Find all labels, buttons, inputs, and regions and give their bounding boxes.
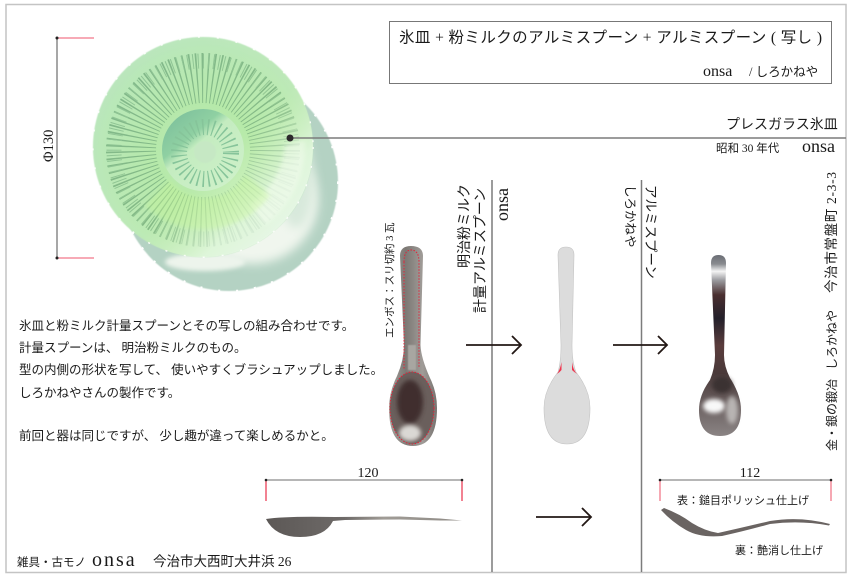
finish note: front: 表：鎚目ポリッシュ仕上げ (677, 493, 809, 507)
intro text block: しろかねやさんの製作です。 (19, 386, 180, 400)
footer shop info: 雑具・古モノ (17, 555, 86, 569)
dimension: copied spoon length: 112 (740, 466, 760, 481)
plate era and maker (716, 136, 835, 156)
emboss note: エンボス：スリ切約 3 瓦 (383, 222, 396, 338)
finish note: back: 裏：艶消し仕上げ (735, 543, 823, 557)
intro text block: 氷皿と粉ミルク計量スプーンとその写しの組み合わせです。 (19, 318, 354, 333)
intro text block: 型の内側の形状を写して、 使いやすくブラシュアップしました。 (19, 362, 383, 377)
intro text block (19, 318, 383, 443)
dimension: plate diameter: Φ130 (41, 130, 57, 162)
maker credit (703, 63, 818, 80)
copied spoon side view (661, 508, 830, 536)
vertical shop info: 金・銀の鍛冶 (825, 379, 839, 451)
vertical shop info (824, 172, 839, 451)
column dividers (492, 180, 642, 572)
spoon template silhouette (544, 247, 590, 444)
original spoon photo (389, 246, 437, 446)
title text: 氷皿 + 粉ミルクのアルミスプーン + アルミスプーン ( 写し ) (399, 28, 822, 46)
center well (162, 109, 244, 191)
glass plate photo (93, 37, 338, 291)
vertical shop info: 今治市常盤町 2-3-3 (824, 172, 839, 293)
column label: onsa: onsa (492, 188, 512, 221)
back plate (120, 73, 338, 291)
intro text block: 計量スプーンは、 明治粉ミルクのもの。 (19, 340, 247, 355)
column label: shirokaneya (623, 185, 658, 279)
title box (390, 22, 832, 84)
plate label: プレスガラス氷皿 (726, 117, 838, 133)
maker credit: / しろかねや (749, 65, 818, 79)
front plate (93, 37, 313, 257)
column label: shirokaneya: しろかねや (623, 185, 637, 248)
original spoon side view (266, 516, 462, 537)
plate era and maker: onsa (802, 136, 835, 156)
arrow: side view (536, 508, 591, 526)
copied spoon photo (699, 255, 741, 436)
footer shop info: onsa (92, 549, 137, 571)
column label: milk spoon (457, 184, 489, 313)
maker credit: onsa (703, 63, 732, 80)
intro text block: 前回と器は同じですが、 少し趣が違って楽しめるかと。 (19, 428, 334, 443)
dimension: plate diameter (41, 36, 94, 260)
arrow: photo to template (466, 336, 521, 354)
leader line: plate (286, 134, 846, 142)
footer shop info (17, 549, 292, 571)
plate era and maker: 昭和 30 年代 (716, 141, 780, 155)
arrow: template to copy (613, 336, 667, 354)
column label: shirokaneya: アルミスプーン (643, 185, 658, 279)
vertical shop info: しろかねや (825, 310, 839, 370)
column label: milk spoon: 明治粉ミルク (457, 184, 473, 268)
footer shop info: 今治市大西町大井浜 26 (153, 554, 292, 569)
column label: milk spoon: 計量アルミスプーン (473, 188, 489, 313)
dimension: original spoon length: 120 (358, 466, 378, 481)
